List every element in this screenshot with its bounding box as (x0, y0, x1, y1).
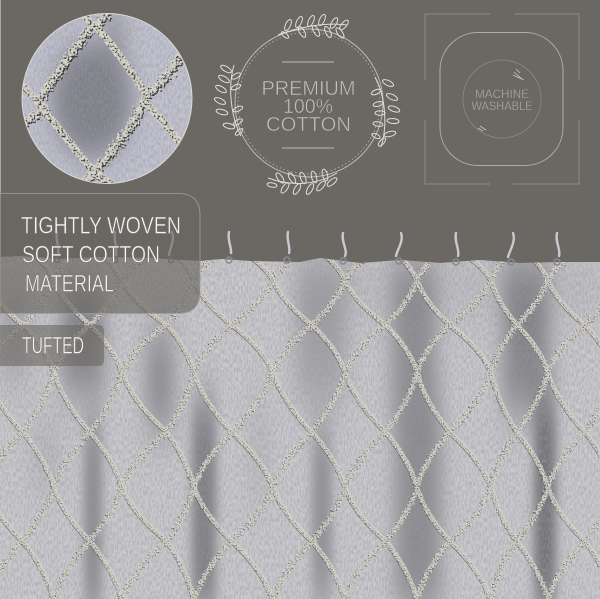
leaf branch top (278, 14, 350, 39)
left edge highlight (0, 0, 1, 257)
panel: tufted label (0, 325, 104, 366)
hooks (54, 232, 560, 265)
leaf branch bottom (267, 169, 338, 195)
wreath rings (235, 29, 383, 177)
glints (478, 69, 524, 131)
callout text: SOFT COTTON (22, 242, 160, 268)
badge text: COTTON (266, 113, 351, 136)
hook 3 (168, 232, 174, 262)
badge text (262, 77, 356, 136)
premium cotton badge (214, 14, 400, 195)
swatch circle (22, 10, 192, 186)
top divider (282, 62, 334, 63)
panel: tightly woven callout (0, 194, 200, 314)
bottom divider (282, 148, 334, 149)
tufted text: TUFTED (22, 332, 84, 360)
rounded square (440, 32, 563, 166)
washable text (472, 87, 532, 113)
hook 4 (226, 232, 232, 263)
tufted lattice (0, 245, 600, 599)
hook 1 (54, 232, 60, 262)
hook 10 (554, 233, 560, 265)
washable text: MACHINE (475, 87, 529, 101)
badge text: PREMIUM (262, 77, 356, 100)
corner frame (425, 14, 579, 184)
hook 7 (396, 233, 402, 264)
hook 2 (112, 232, 118, 262)
callout text: MATERIAL (25, 270, 114, 298)
hook 9 (508, 233, 514, 265)
inner circle (463, 60, 541, 138)
callout text: TIGHTLY WOVEN (21, 212, 181, 240)
callout text (21, 212, 181, 298)
washable text: WASHABLE (472, 99, 532, 113)
badge text: 100% (283, 95, 333, 118)
machine washable badge (425, 14, 579, 184)
leaf branch left (214, 64, 244, 136)
leaf branch right (371, 77, 400, 147)
hook 8 (453, 233, 459, 265)
lattice shadow (0, 246, 600, 599)
hook 6 (340, 233, 346, 264)
curtain photo (0, 245, 600, 599)
hook 5 (284, 232, 290, 263)
